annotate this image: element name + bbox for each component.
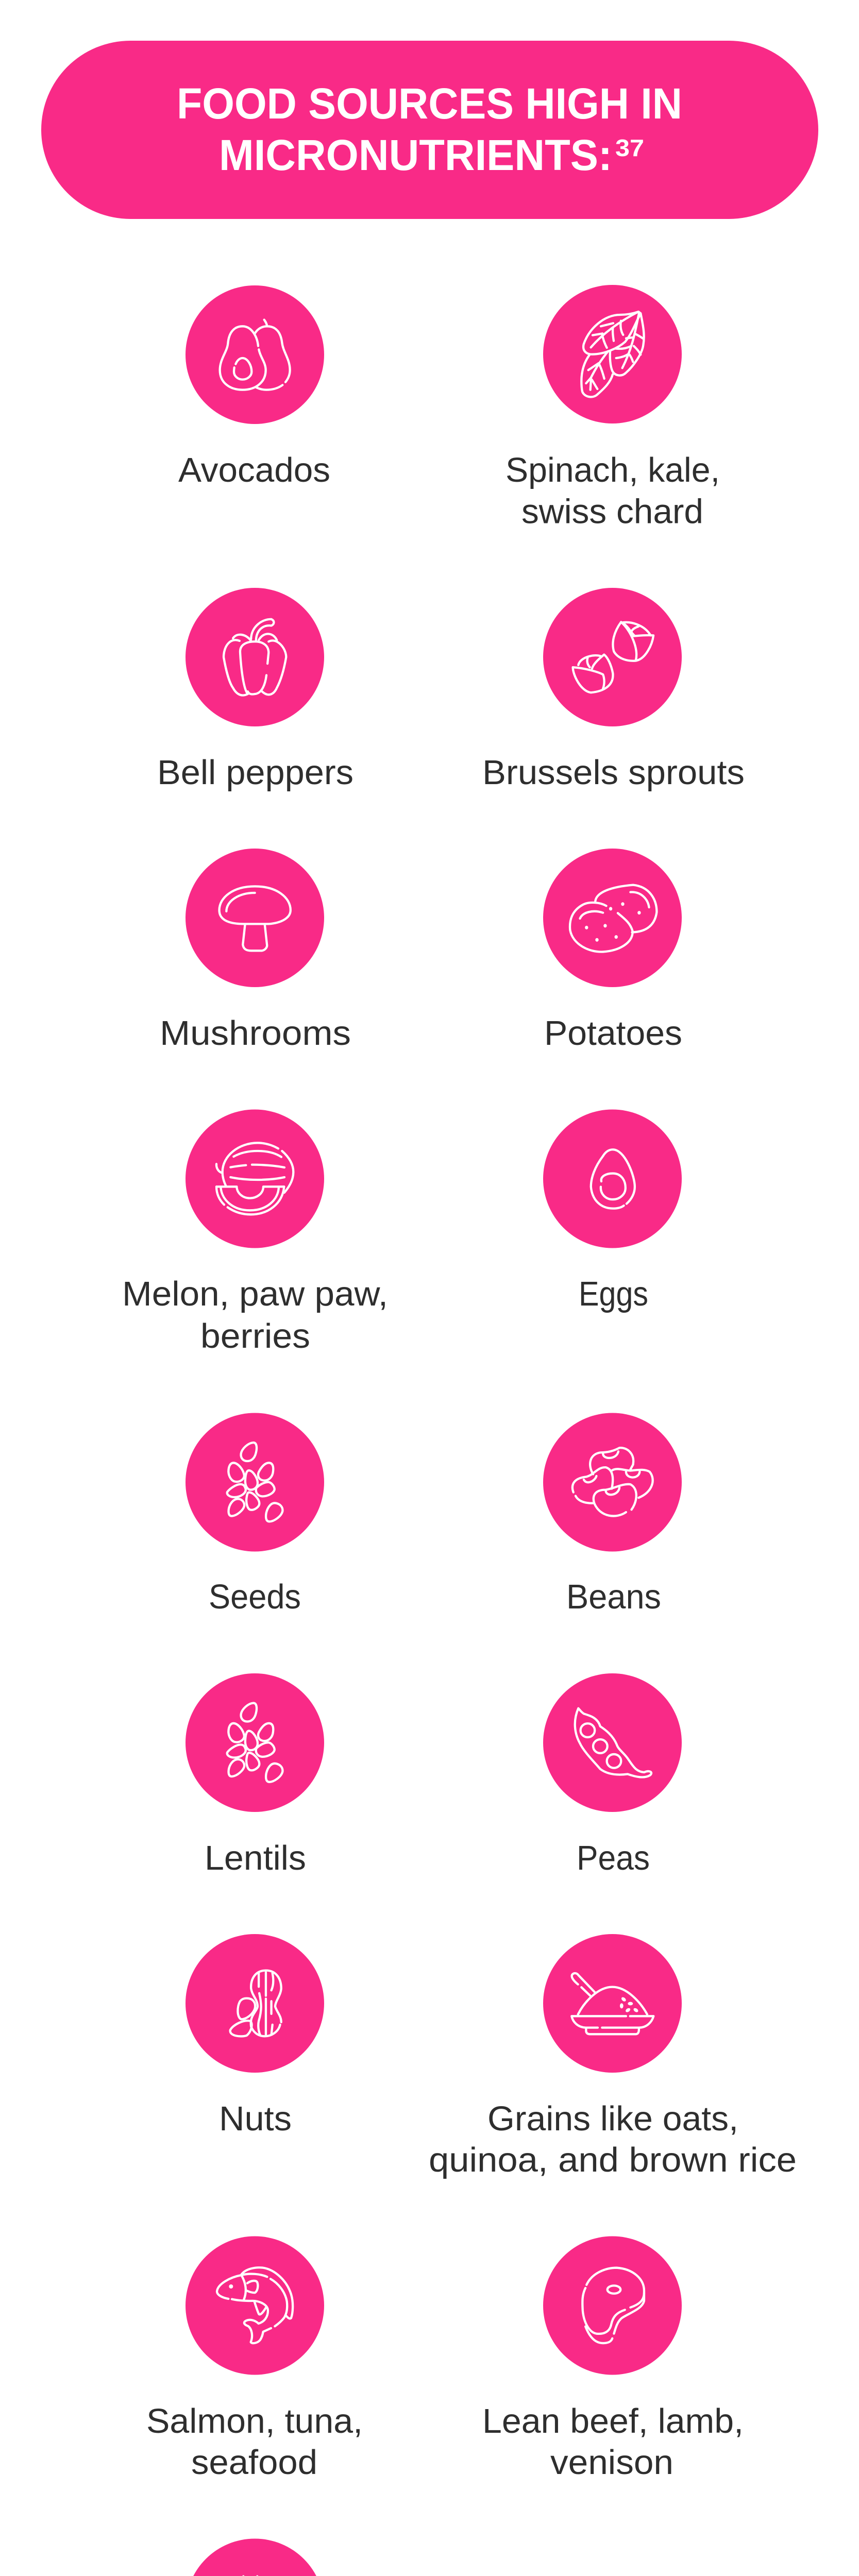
icon: peanut: [230, 1971, 281, 2036]
item: spinach, kale, swiss chard: Spinach, kale,: [506, 451, 720, 489]
icon: bowl of grains: [571, 1973, 653, 2034]
item: bell peppers: [157, 588, 353, 792]
item: brussels sprouts: [482, 588, 745, 792]
item: melon, paw paw, berries: Melon, paw paw,: [122, 1275, 388, 1313]
item: mushrooms: [160, 849, 351, 1053]
icon: egg: [591, 1149, 635, 1209]
item: seeds: [186, 1413, 324, 1616]
item: melon, paw paw, berries: berries: [200, 1317, 310, 1355]
item: beans: Beans: [566, 1578, 661, 1616]
item: bell peppers: Bell peppers: [157, 753, 353, 792]
icon: seeds: [227, 1443, 282, 1521]
item: beans: [543, 1413, 682, 1616]
icon: bell pepper: [224, 619, 286, 696]
item: potatoes: [543, 849, 682, 1053]
icon: melon: [216, 1143, 293, 1214]
icon: fish: [217, 2267, 293, 2343]
item: lean beef, lamb, venison: Lean beef, lamb,: [482, 2402, 744, 2441]
title banner: FOOD SOURCES HIGH IN: [177, 79, 682, 128]
item: brussels sprouts: Brussels sprouts: [482, 753, 745, 792]
item: spinach, kale, swiss chard: [506, 285, 720, 531]
item: salmon, tuna, seafood: [146, 2236, 363, 2482]
icon: avocados: [220, 320, 290, 390]
item: grains: [429, 1934, 797, 2179]
item: lentils: [186, 1673, 324, 1877]
item: avocados: [178, 285, 330, 489]
item: eggs: [543, 1110, 682, 1313]
icon: pea pod: [575, 1708, 651, 1777]
title banner: [41, 41, 818, 219]
title banner: 37: [615, 134, 644, 161]
icon: lentils: [227, 1703, 282, 1782]
item: lean beef, lamb, venison: venison: [550, 2443, 673, 2482]
item: potatoes: Potatoes: [544, 1014, 682, 1053]
item: grains: quinoa, and brown rice: [429, 2141, 797, 2179]
item: lentils: Lentils: [205, 1839, 306, 1877]
item: mushrooms: Mushrooms: [160, 1014, 351, 1053]
item: lean beef, lamb, venison: [482, 2236, 744, 2482]
item: eggs: Eggs: [579, 1275, 648, 1313]
item: nuts: Nuts: [219, 2099, 292, 2138]
item: grains: Grains like oats,: [487, 2099, 738, 2138]
icon: steak: [582, 2268, 644, 2343]
item: seeds: Seeds: [209, 1578, 301, 1616]
icon: leaves: [581, 312, 644, 397]
title banner: MICRONUTRIENTS:: [219, 131, 612, 179]
icon: beans: [572, 1448, 653, 1516]
item: spinach, kale, swiss chard: swiss chard: [521, 493, 703, 531]
item: peas: Peas: [577, 1839, 650, 1877]
item: chicken, turkey: [134, 2539, 378, 2576]
item: salmon, tuna, seafood: Salmon, tuna,: [146, 2402, 363, 2441]
icon: mushroom: [220, 886, 291, 951]
item: avocados: Avocados: [178, 451, 330, 489]
icon: potatoes: [570, 885, 656, 952]
item: salmon, tuna, seafood: seafood: [191, 2443, 317, 2482]
icon: brussels sprouts: [573, 622, 653, 692]
item: peas: [543, 1673, 682, 1877]
item: melon, paw paw, berries: [122, 1110, 388, 1355]
item: nuts: [186, 1934, 324, 2138]
